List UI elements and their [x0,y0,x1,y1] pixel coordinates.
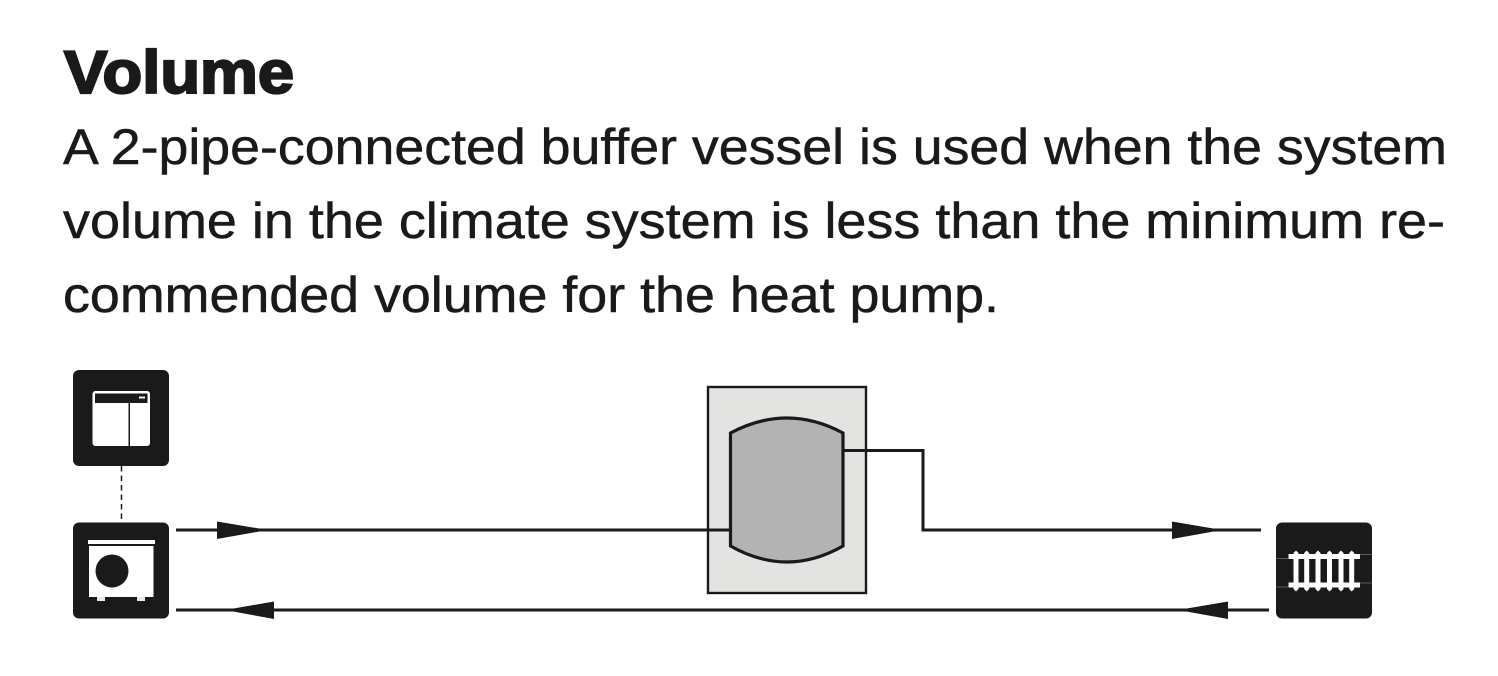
description text: A 2-pipe-connected buffer vessel is used when the system [63,119,1447,175]
control link: dashed line [120,466,122,522]
buffer vessel enclosure [708,387,866,593]
icon: radiator [1276,522,1372,618]
pipe: flow from heat pump to buffer vessel [176,522,730,539]
icon: heat pump [73,522,169,618]
pipe: flow from buffer vessel to radiator [844,450,1261,539]
description text [63,119,1447,323]
title: Volume [64,39,294,106]
description text: commended volume for the heat pump. [63,267,999,323]
description text: volume in the climate system is less than the minimum re- [63,193,1445,249]
vessel tank [730,418,843,562]
pipe: return to heat pump [176,602,1269,619]
icon: controller [73,370,169,466]
